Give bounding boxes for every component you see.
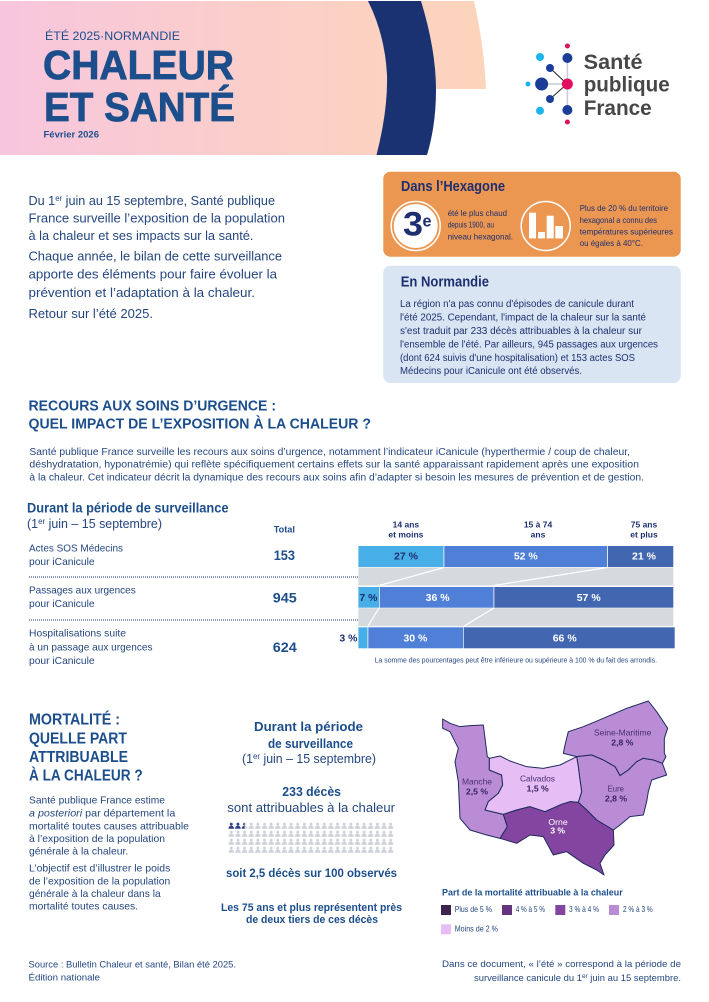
40°C text: hexagonal a connu des xyxy=(580,215,657,225)
row: SOS Médecins: pour iCanicule xyxy=(29,556,95,568)
panel: En Normandie xyxy=(383,266,681,383)
central mortality figures: juin – 15 septembre) xyxy=(260,752,376,766)
row: hospitalisations: Hospitalisations suite xyxy=(29,628,126,640)
intro text: Chaque année, le bilan de cette surveillance xyxy=(28,249,282,264)
Calvados xyxy=(485,756,582,814)
map labels: Seine-Maritime xyxy=(594,728,652,738)
map legend: 2 % à 3 % xyxy=(623,904,653,914)
central mortality figures: 233 décès xyxy=(282,785,341,799)
chart heading: (1 xyxy=(27,517,38,531)
Seine-Maritime xyxy=(563,701,668,776)
icon: 3e badge: 3 xyxy=(403,206,423,244)
logo: Santé publique France: Santé xyxy=(584,51,642,74)
panel: Dans l'Hexagone xyxy=(383,172,681,257)
map legend xyxy=(441,887,653,934)
text: mortalité: à l’exposition de la population xyxy=(29,833,165,845)
intro text: prévention et l’adaptation à la chaleur. xyxy=(28,285,255,300)
Normandie body text: La région n'a pas connu d'épisodes de canicule durant xyxy=(400,299,634,310)
heading: recours aux soins xyxy=(28,399,371,432)
heading: recours aux soins: QUEL IMPACT DE L’EXPOSITION À LA CHALEUR ? xyxy=(28,415,371,432)
row: SOS Médecins: 153 xyxy=(274,547,295,563)
map labels: 1,5 % xyxy=(527,784,549,794)
chart heading: juin – 15 septembre) xyxy=(45,517,162,531)
map legend: 3 % à 4 % xyxy=(569,904,599,914)
text: mortalité: a posteriori par département la xyxy=(29,808,175,820)
age headers: et plus xyxy=(630,530,658,540)
map labels: 2,5 % xyxy=(466,786,488,796)
chart: recours par âge xyxy=(29,520,675,667)
age headers: 14 ans xyxy=(393,520,419,530)
icon: bars xyxy=(521,202,570,250)
row: passages aux urgences: Passages aux urgences xyxy=(29,585,136,597)
map labels: 2,8 % xyxy=(611,738,634,748)
intro text: Du 1 xyxy=(28,193,56,208)
row: hospitalisations: à un passage aux urgences xyxy=(29,642,152,654)
header title: ET SANTÉ xyxy=(44,84,235,130)
heading: mortalité xyxy=(29,711,143,785)
header title: CHALEUR xyxy=(43,42,234,88)
header title: Février 2026 xyxy=(44,130,99,140)
header banner xyxy=(0,1,486,155)
header title xyxy=(43,28,235,140)
map labels xyxy=(462,728,652,836)
text: mortalité: Santé publique France estime xyxy=(29,795,165,807)
40°C text xyxy=(580,203,673,248)
intro text: France surveille l’exposition de la population xyxy=(28,211,285,226)
3e text xyxy=(448,208,513,242)
panel: Dans l'Hexagone: Dans l’Hexagone xyxy=(401,179,505,195)
text: recours intro xyxy=(29,447,644,484)
heading: mortalité: QUELLE PART xyxy=(29,730,127,747)
central mortality figures: de surveillance xyxy=(268,736,353,751)
text: mortalité: mortalité toutes causes. xyxy=(29,901,138,913)
central mortality figures: (1 xyxy=(242,752,253,766)
row: hospitalisations: 66 % xyxy=(553,633,577,645)
40°C text: Plus de 20 % du territoire xyxy=(580,203,668,213)
row: hospitalisations: pour iCanicule xyxy=(29,655,95,667)
note: définition de l'été: er xyxy=(582,973,589,980)
text: mortalité: L’objectif est d’illustrer le poids xyxy=(29,863,170,875)
intro text: er xyxy=(55,194,62,203)
chart heading: Durant la période de surveillance xyxy=(27,501,229,516)
Normandie body text: l'ensemble de l'été. Par ailleurs, 945 passages aux urgences xyxy=(400,340,658,351)
Orne xyxy=(500,802,614,875)
map legend: Part de la mortalité attribuable à la chaleur xyxy=(442,887,623,898)
text: recours intro: déshydratation, hyponatrémie) qui reflète spécifiquement certains effets sur la santé apparaissant rapidement après une exposition xyxy=(29,460,639,471)
source: Édition nationale xyxy=(28,973,100,984)
map: Normandie xyxy=(443,701,668,875)
map labels: 3 % xyxy=(550,826,565,836)
header navy arc xyxy=(368,1,436,155)
Normandie body text: Médecins pour iCanicule ont été observés. xyxy=(400,366,582,377)
row: SOS Médecins: 27 % xyxy=(394,550,419,562)
central mortality figures: sont attribuables à la chaleur xyxy=(227,801,395,815)
row: passages aux urgences: 7 % xyxy=(359,592,378,604)
logo: Santé publique France xyxy=(526,44,670,124)
row: SOS Médecins: Actes SOS Médecins xyxy=(29,543,123,555)
age headers: et moins xyxy=(388,530,424,540)
panel: En Normandie: En Normandie xyxy=(401,275,489,291)
row: SOS Médecins: 52 % xyxy=(514,550,538,562)
icon grid: 100 people xyxy=(228,822,394,854)
3e text: depuis 1900, au xyxy=(448,220,494,230)
intro text: Retour sur l’été 2025. xyxy=(28,306,153,321)
text: recours intro: à la chaleur. Cet indicateur décrit la dynamique des recours aux soins afin d’adapter si besoin les mesures de prévention et de gestion. xyxy=(29,473,644,484)
row: hospitalisations: 624 xyxy=(273,639,297,655)
central mortality figures xyxy=(221,719,402,926)
note: définition de l'été: juin au 15 septembre. xyxy=(588,973,681,984)
row: passages aux urgences: 57 % xyxy=(577,592,601,604)
map labels: Orne xyxy=(548,817,568,827)
connector bands xyxy=(358,568,673,626)
row: passages aux urgences: 945 xyxy=(273,590,297,606)
Normandie body text: (dont 624 suivis d'une hospitalisation) et 153 actes SOS xyxy=(400,353,635,364)
40°C text: températures supérieures xyxy=(580,226,673,236)
heading: mortalité: À LA CHALEUR ? xyxy=(29,768,143,785)
row: passages aux urgences: 36 % xyxy=(426,592,450,604)
note: définition de l'été: surveillance canicule du 1 xyxy=(474,973,583,984)
text: mortalité: mortalité toutes causes attribuable xyxy=(29,821,189,833)
intro text xyxy=(28,193,285,321)
row: SOS Médecins: 21 % xyxy=(632,550,657,562)
row: passages aux urgences: pour iCanicule xyxy=(29,598,95,610)
text: mortalité: de l’exposition de la population xyxy=(29,876,170,888)
total header: Total xyxy=(274,525,295,536)
intro text: à la chaleur et ses impacts sur la santé. xyxy=(28,228,254,243)
map legend: Plus de 5 % xyxy=(455,904,492,914)
map labels: 2,8 % xyxy=(605,794,627,804)
chart footnote: La somme des pourcentages peut être inférieure ou supérieure à 100 % du fait des arrondis. xyxy=(375,656,657,665)
age headers: 75 ans xyxy=(631,520,658,530)
icon: 3e badge: e xyxy=(422,212,432,231)
source: Source : Bulletin Chaleur et santé, Bilan été 2025. xyxy=(28,960,236,971)
map labels: Manche xyxy=(462,776,492,786)
text: recours intro: Santé publique France surveille les recours aux soins d’urgence, notamment l’indicateur iCanicule (hyperthermie / coup de chaleur, xyxy=(29,447,630,458)
central mortality figures: soit 2,5 décès sur 100 observés xyxy=(226,868,397,880)
row: SOS Médecins xyxy=(29,543,673,568)
row: passages aux urgences xyxy=(29,585,673,610)
central mortality figures: de deux tiers de ces décès xyxy=(246,914,378,926)
map labels: Calvados xyxy=(520,774,556,784)
heading: recours aux soins: RECOURS AUX SOINS D’URGENCE : xyxy=(28,399,276,415)
Normandie body text xyxy=(400,299,658,377)
map legend: Moins de 2 % xyxy=(455,924,498,934)
map labels: Eure xyxy=(608,784,624,794)
3e text: niveau hexagonal. xyxy=(448,232,513,242)
3e text: été le plus chaud xyxy=(448,208,507,218)
central mortality figures: Durant la période xyxy=(254,719,363,734)
note: définition de l'été: Dans ce document, « l’été » correspond à la période de xyxy=(442,959,681,970)
40°C text: ou égales à 40°C. xyxy=(580,238,643,248)
chart heading: er xyxy=(38,517,45,526)
Eure xyxy=(577,755,667,830)
icon: 3e badge xyxy=(391,202,440,250)
row: hospitalisations xyxy=(29,627,675,667)
text: mortalité: générale à la chaleur. xyxy=(29,846,128,858)
chart heading xyxy=(27,501,229,531)
text: mortalité: générale à la chaleur dans la xyxy=(29,888,161,900)
central mortality figures: Les 75 ans et plus représentent près xyxy=(221,902,402,914)
text: mortalité xyxy=(29,795,189,913)
central mortality figures: er xyxy=(253,752,260,761)
intro text: apporte des éléments pour faire évoluer la xyxy=(28,267,278,282)
header title: ÉTÉ 2025·NORMANDIE xyxy=(45,28,180,43)
row: hospitalisations: 3 % xyxy=(339,633,358,645)
Manche xyxy=(443,719,507,838)
age headers: ans xyxy=(531,530,546,540)
logo: Santé publique France: publique xyxy=(584,74,670,97)
row: hospitalisations: 30 % xyxy=(403,633,428,645)
age headers: 15 à 74 xyxy=(524,520,552,530)
logo: Santé publique France: France xyxy=(584,97,652,120)
map legend: 4 % à 5 % xyxy=(516,904,545,914)
Normandie body text: s'est traduit par 233 décès attribuables à la chaleur sur xyxy=(400,326,643,337)
intro text: juin au 15 septembre, Santé publique xyxy=(62,193,275,208)
age headers xyxy=(388,520,658,540)
note: définition de l'été xyxy=(442,959,681,984)
Normandie body text: l'été 2025. Cependant, l'impact de la chaleur sur la santé xyxy=(400,313,646,324)
source xyxy=(28,960,236,984)
heading: mortalité: MORTALITÉ : xyxy=(29,711,120,728)
heading: mortalité: ATTRIBUABLE xyxy=(29,749,128,766)
